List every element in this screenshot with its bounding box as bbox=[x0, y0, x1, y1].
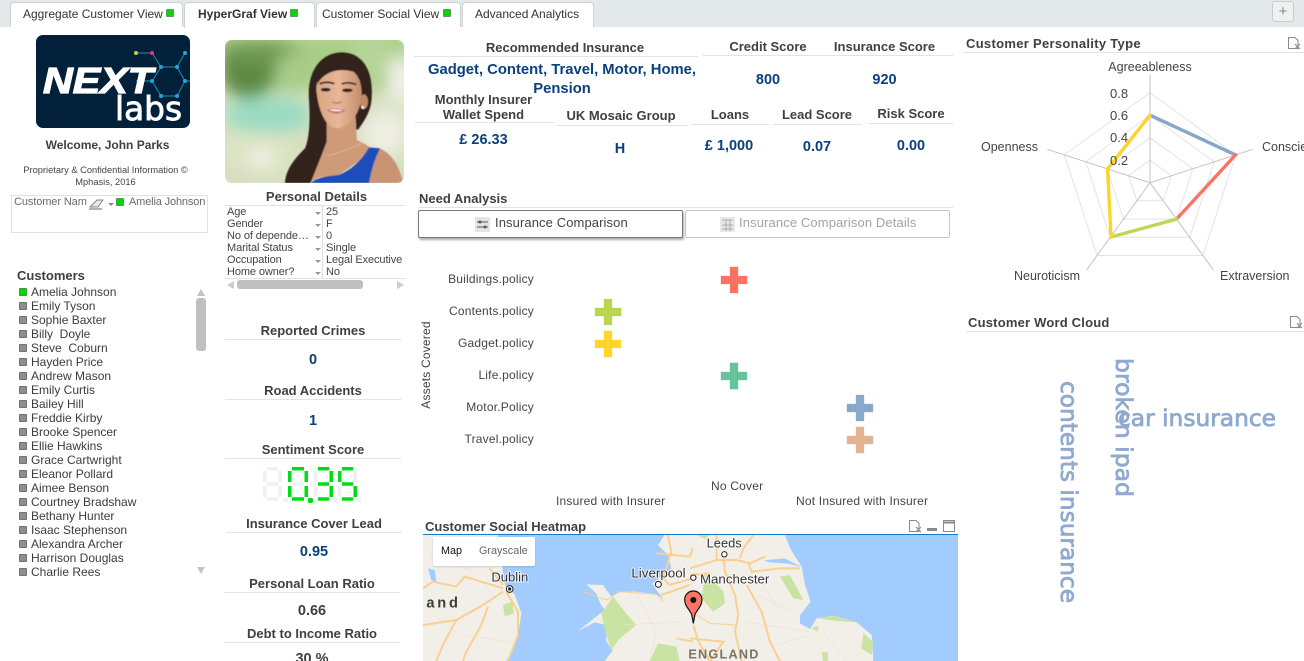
customer name filter bbox=[11, 195, 208, 233]
metric: road accidents: Road Accidents bbox=[264, 383, 362, 398]
chart: word cloud bbox=[1055, 358, 1276, 603]
logo: NEXT bbox=[43, 60, 156, 101]
panel: personal details: Age bbox=[227, 206, 246, 218]
tab: HyperGraf View bbox=[184, 2, 315, 28]
metric: personal loan ratio: 0.66 bbox=[298, 603, 326, 619]
panel: customers list: Hayden Price bbox=[31, 355, 103, 369]
panel: personal details: Legal Executive bbox=[326, 254, 402, 266]
shoulder bbox=[369, 148, 403, 183]
map labels: Dublin bbox=[491, 571, 528, 585]
KPI: insurance score: 920 bbox=[872, 72, 897, 88]
heading: customer social heatmap: Customer Social Heatmap bbox=[425, 519, 586, 534]
KPI: monthly insurer wallet spend bbox=[415, 92, 554, 148]
KPI: UK mosaic group bbox=[556, 108, 688, 157]
heading: customer personality type bbox=[964, 35, 1304, 53]
chart: insurance coverage scatter: Gadget.policy bbox=[458, 336, 534, 350]
marker: buildings no cover bbox=[720, 266, 748, 294]
panel: customers list: Sophie Baxter bbox=[31, 313, 106, 327]
panel: personal details bbox=[225, 189, 406, 289]
KPI: monthly insurer wallet spend: Wallet Spend bbox=[443, 107, 524, 122]
chart: personality radar: Openness bbox=[981, 140, 1038, 154]
heading: customers: Customers bbox=[17, 268, 85, 283]
metric: debt to income ratio: Debt to Income Ratio bbox=[247, 626, 377, 641]
chart: insurance coverage scatter: Insured with Insurer bbox=[556, 494, 665, 508]
panel: customers list: Aimee Benson bbox=[31, 481, 109, 495]
KPI: lead score: 0.07 bbox=[803, 139, 831, 155]
chart: insurance coverage scatter: Travel.policy bbox=[464, 432, 534, 446]
logo bbox=[36, 35, 190, 128]
tab: Aggregate Customer View: Aggregate Customer View bbox=[23, 7, 163, 21]
tab: Customer Social View bbox=[316, 2, 461, 27]
button: insurance comparison: Insurance Comparison bbox=[495, 215, 628, 230]
heading: sentiment score: Sentiment Score bbox=[262, 442, 364, 457]
parks bbox=[503, 535, 873, 661]
panel: customers list: Alexandra Archer bbox=[31, 537, 123, 551]
city markers bbox=[506, 552, 727, 592]
heading: customer word cloud: Customer Word Cloud bbox=[968, 315, 1110, 330]
map: ENGLAND bbox=[688, 647, 758, 661]
panel: customers list: Eleanor Pollard bbox=[31, 467, 113, 481]
KPI: loans: Loans bbox=[711, 107, 749, 122]
KPI: recommended insurance bbox=[414, 40, 698, 97]
metric: reported crimes: 0 bbox=[309, 352, 317, 368]
face bbox=[316, 67, 362, 128]
tab: Customer Social View: Customer Social View bbox=[322, 7, 439, 21]
chart: insurance coverage scatter: Buildings.policy bbox=[448, 272, 534, 286]
metric: debt to income ratio bbox=[224, 626, 400, 661]
KPI: credit score: 800 bbox=[756, 72, 780, 88]
customer name filter: Customer Nam bbox=[14, 196, 87, 208]
panel: customers list: Bethany Hunter bbox=[31, 509, 114, 523]
metric: insurance cover lead: Insurance Cover Lead bbox=[246, 516, 382, 531]
metric: insurance cover lead: 0.95 bbox=[300, 544, 328, 560]
chart: word cloud: contents insurance bbox=[1055, 381, 1083, 603]
KPI: insurance score bbox=[831, 39, 953, 88]
y axis title: Assets Covered bbox=[419, 321, 433, 409]
heading: customer personality type: Customer Personality Type bbox=[966, 36, 1141, 51]
panel: personal details: Occupation bbox=[227, 254, 282, 266]
panel window icons bbox=[909, 520, 955, 532]
panel: customers list: Grace Cartwright bbox=[31, 453, 122, 467]
tab: HyperGraf View: HyperGraf View bbox=[198, 7, 287, 21]
chart: insurance coverage scatter: Contents.policy bbox=[449, 304, 534, 318]
chart: word cloud: car insurance bbox=[1118, 404, 1276, 432]
panel: customers list: Emily Curtis bbox=[31, 383, 95, 397]
metric: personal loan ratio bbox=[224, 576, 400, 619]
LED gauge: sentiment score 0.35 bbox=[263, 467, 361, 503]
metric: insurance cover lead bbox=[226, 516, 402, 560]
KPI: risk score: Risk Score bbox=[877, 106, 945, 121]
major roads bbox=[423, 535, 800, 661]
metric: reported crimes bbox=[225, 323, 401, 368]
map type control: Grayscale bbox=[479, 545, 528, 557]
map type control: Map bbox=[441, 545, 462, 557]
heading: customer word cloud bbox=[966, 314, 1304, 332]
panel: customers list: Isaac Stephenson bbox=[31, 523, 127, 537]
panel: personal details: Home owner? bbox=[227, 266, 294, 278]
marker: motor not insured bbox=[846, 394, 874, 422]
map labels: Manchester bbox=[700, 573, 769, 587]
panel: customers list: Steve Coburn bbox=[31, 341, 108, 355]
chart: insurance coverage scatter: Motor.Policy bbox=[466, 400, 534, 414]
chart: insurance coverage scatter: No Cover bbox=[711, 479, 763, 493]
scrollbar bbox=[196, 289, 206, 574]
map type control bbox=[433, 537, 535, 566]
metric: road accidents: 1 bbox=[309, 413, 317, 429]
button: insurance comparison bbox=[418, 210, 683, 238]
panel: customers list: Amelia Johnson bbox=[31, 285, 116, 299]
panel: customers list: Ellie Hawkins bbox=[31, 439, 102, 453]
KPI: monthly insurer wallet spend: Monthly Insurer bbox=[435, 92, 532, 107]
panel: personal details: 0 bbox=[326, 230, 332, 242]
add tab button: + bbox=[1279, 3, 1287, 20]
water: Humber and lakes bbox=[764, 558, 802, 567]
land: Great Britain bbox=[578, 535, 873, 661]
panel: personal details: Gender bbox=[227, 218, 263, 230]
map bbox=[423, 535, 958, 661]
minor roads bbox=[430, 555, 846, 661]
hair bbox=[285, 52, 372, 183]
panel: customers list: Courtney Bradshaw bbox=[31, 495, 136, 509]
map labels: Leeds bbox=[707, 537, 742, 551]
panel: personal details: F bbox=[326, 218, 333, 230]
KPI: loans: £ 1,000 bbox=[705, 138, 753, 154]
panel: customers list bbox=[17, 268, 206, 579]
ear bbox=[360, 94, 368, 109]
chart: personality radar: Extraversion bbox=[1220, 269, 1290, 283]
map labels bbox=[491, 537, 769, 587]
KPI: credit score: Credit Score bbox=[729, 39, 807, 54]
panel: customers list: Freddie Kirby bbox=[31, 411, 102, 425]
icon: eraser bbox=[88, 200, 114, 210]
panel: personal details: 25 bbox=[326, 206, 338, 218]
chart: insurance coverage scatter bbox=[419, 266, 928, 508]
panel: personal details: Single bbox=[326, 242, 356, 254]
welcome text: Welcome, John Parks bbox=[46, 138, 169, 152]
land: Ireland bbox=[423, 535, 521, 661]
metric: road accidents bbox=[225, 383, 401, 429]
panel: customers list: Andrew Mason bbox=[31, 369, 111, 383]
KPI: loans bbox=[691, 107, 769, 154]
KPI: UK mosaic group: UK Mosaic Group bbox=[566, 108, 676, 123]
panel: customers list: Emily Tyson bbox=[31, 299, 95, 313]
heading: personal details: Personal Details bbox=[266, 189, 367, 204]
KPI: monthly insurer wallet spend: £ 26.33 bbox=[459, 132, 508, 148]
panel: customers list: Charlie Rees bbox=[31, 565, 100, 579]
customer portrait bbox=[225, 40, 404, 183]
panel: customers list: Billy Doyle bbox=[31, 327, 90, 341]
confidentiality note: Proprietary & Confidential Information © Mphasis, 2016 bbox=[23, 165, 188, 187]
metric: personal loan ratio: Personal Loan Ratio bbox=[249, 576, 375, 591]
KPI: lead score: Lead Score bbox=[782, 107, 852, 122]
tab: Advanced Analytics bbox=[462, 2, 594, 27]
dress bbox=[311, 147, 380, 183]
button: insurance comparison details: Insurance Comparison Details bbox=[739, 215, 916, 230]
chart: personality radar: Agreeableness bbox=[1108, 60, 1192, 74]
marker: contents insured bbox=[594, 298, 622, 326]
panel: customers list: Harrison Douglas bbox=[31, 551, 124, 565]
KPI: lead score bbox=[773, 107, 862, 155]
chart: personality radar: Neuroticism bbox=[1014, 269, 1080, 283]
metric: reported crimes: Reported Crimes bbox=[261, 323, 365, 338]
panel: customers list: Brooke Spencer bbox=[31, 425, 117, 439]
KPI: recommended insurance: Recommended Insurance bbox=[486, 40, 644, 55]
chart: word cloud: broken ipad bbox=[1110, 358, 1138, 497]
KPI: risk score: 0.00 bbox=[897, 138, 925, 154]
marker: gadget insured bbox=[594, 330, 622, 358]
heading: need analysis: Need Analysis bbox=[419, 191, 507, 206]
marker: travel not insured bbox=[846, 426, 874, 454]
button: insurance comparison details bbox=[685, 210, 950, 238]
table dropdown arrows bbox=[315, 212, 321, 275]
chart: personality radar: 0.2 bbox=[1110, 153, 1128, 168]
chart: personality radar bbox=[981, 60, 1304, 283]
tab bar bbox=[0, 0, 1304, 27]
map: and bbox=[426, 596, 458, 612]
customer name filter: Amelia Johnson bbox=[129, 196, 205, 208]
panel: customers list: Bailey Hill bbox=[31, 397, 84, 411]
chart: personality radar: 0.4 bbox=[1110, 130, 1128, 145]
map pin bbox=[685, 591, 702, 623]
KPI: risk score bbox=[869, 106, 953, 154]
table scrollbar bbox=[227, 280, 404, 289]
KPI: credit score bbox=[703, 39, 824, 88]
map labels: Liverpool bbox=[631, 567, 686, 581]
tab: Advanced Analytics: Advanced Analytics bbox=[475, 7, 579, 21]
chart: insurance coverage scatter: Life.policy bbox=[478, 368, 534, 382]
heading: customer social heatmap bbox=[423, 518, 958, 535]
KPI: insurance score: Insurance Score bbox=[834, 39, 935, 54]
add tab button bbox=[1272, 1, 1294, 22]
panel: personal details: Marital Status bbox=[227, 242, 293, 254]
chart: personality radar: 0.8 bbox=[1110, 86, 1128, 101]
panel: personal details: No bbox=[326, 266, 340, 278]
neck and chest bbox=[311, 117, 370, 182]
tab: Aggregate Customer View bbox=[10, 2, 183, 27]
series line segments bbox=[1108, 115, 1236, 237]
KPI: UK mosaic group: H bbox=[615, 141, 625, 157]
marker: life no cover bbox=[720, 362, 748, 390]
chart: personality radar: 0.6 bbox=[1110, 108, 1128, 123]
panel: personal details: No of depende… bbox=[227, 230, 309, 242]
logo: labs bbox=[115, 89, 182, 128]
KPI: recommended insurance: Gadget, Content, Travel, Motor, Home, Pension bbox=[428, 62, 696, 97]
chart: insurance coverage scatter: Not Insured with Insurer bbox=[796, 494, 928, 508]
